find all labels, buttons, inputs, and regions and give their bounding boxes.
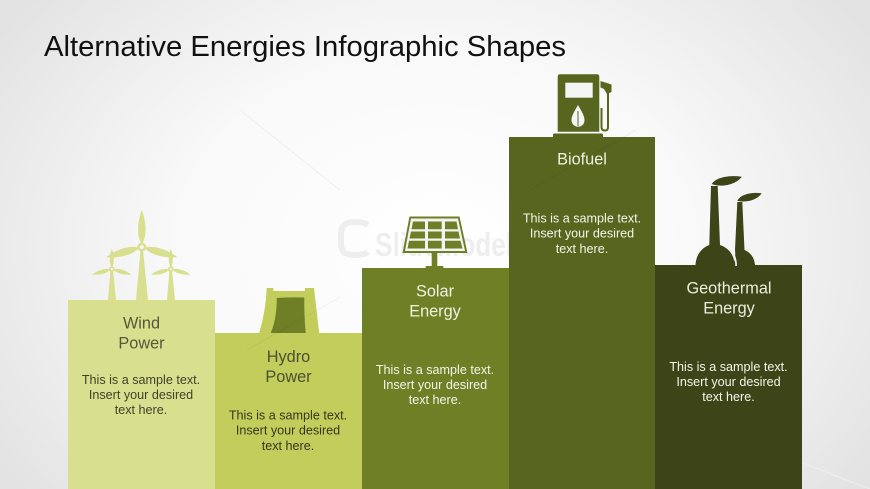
biofuel body text: This is a sample text. — [523, 212, 641, 226]
hydro panel background — [215, 333, 362, 489]
hydro heading: Hydro — [267, 348, 310, 366]
wind panel background — [68, 300, 215, 489]
biofuel body text: Insert your desired — [530, 227, 634, 241]
icon: solar panel — [402, 216, 468, 269]
panel: solar energy — [362, 216, 509, 489]
solar heading: Solar — [416, 282, 455, 300]
geothermal panel background — [655, 265, 802, 489]
geothermal heading: Energy — [703, 300, 756, 318]
icon: geothermal chimneys — [696, 176, 762, 266]
wind heading: Wind — [123, 314, 160, 332]
geothermal body text: This is a sample text. — [669, 360, 788, 374]
solar body text: Insert your desired — [383, 378, 487, 392]
wind body text: This is a sample text. — [82, 373, 200, 387]
solar body text: text here. — [409, 393, 461, 407]
geothermal heading: Geothermal — [686, 280, 772, 298]
title: Alternative Energies Infographic Shapes — [44, 31, 566, 63]
biofuel heading: Biofuel — [557, 150, 607, 168]
biofuel panel background — [509, 137, 655, 489]
watermark: SlideModel — [375, 226, 513, 263]
hydro body text: This is a sample text. — [229, 408, 347, 422]
biofuel body text: text here. — [556, 242, 608, 256]
wind body text: Insert your desired — [89, 388, 193, 402]
icon: fuel pump — [553, 74, 612, 137]
hydro body text: Insert your desired — [236, 424, 340, 438]
icon: dam — [259, 288, 319, 334]
panel: geothermal energy — [655, 176, 802, 489]
solar body text: This is a sample text. — [376, 363, 494, 377]
solar panel background — [362, 268, 509, 489]
hydro heading: Power — [265, 368, 312, 386]
icon: wind turbines — [92, 210, 191, 300]
solar heading: Energy — [409, 302, 462, 320]
panel: wind power — [68, 210, 215, 489]
panel: hydro power — [215, 288, 362, 489]
geothermal body text: Insert your desired — [676, 375, 781, 389]
hydro body text: text here. — [262, 439, 314, 453]
wind heading: Power — [118, 334, 165, 352]
geothermal body text: text here. — [702, 390, 755, 404]
watermark — [341, 222, 513, 263]
wind body text: text here. — [115, 403, 167, 417]
panel: biofuel — [509, 74, 655, 489]
